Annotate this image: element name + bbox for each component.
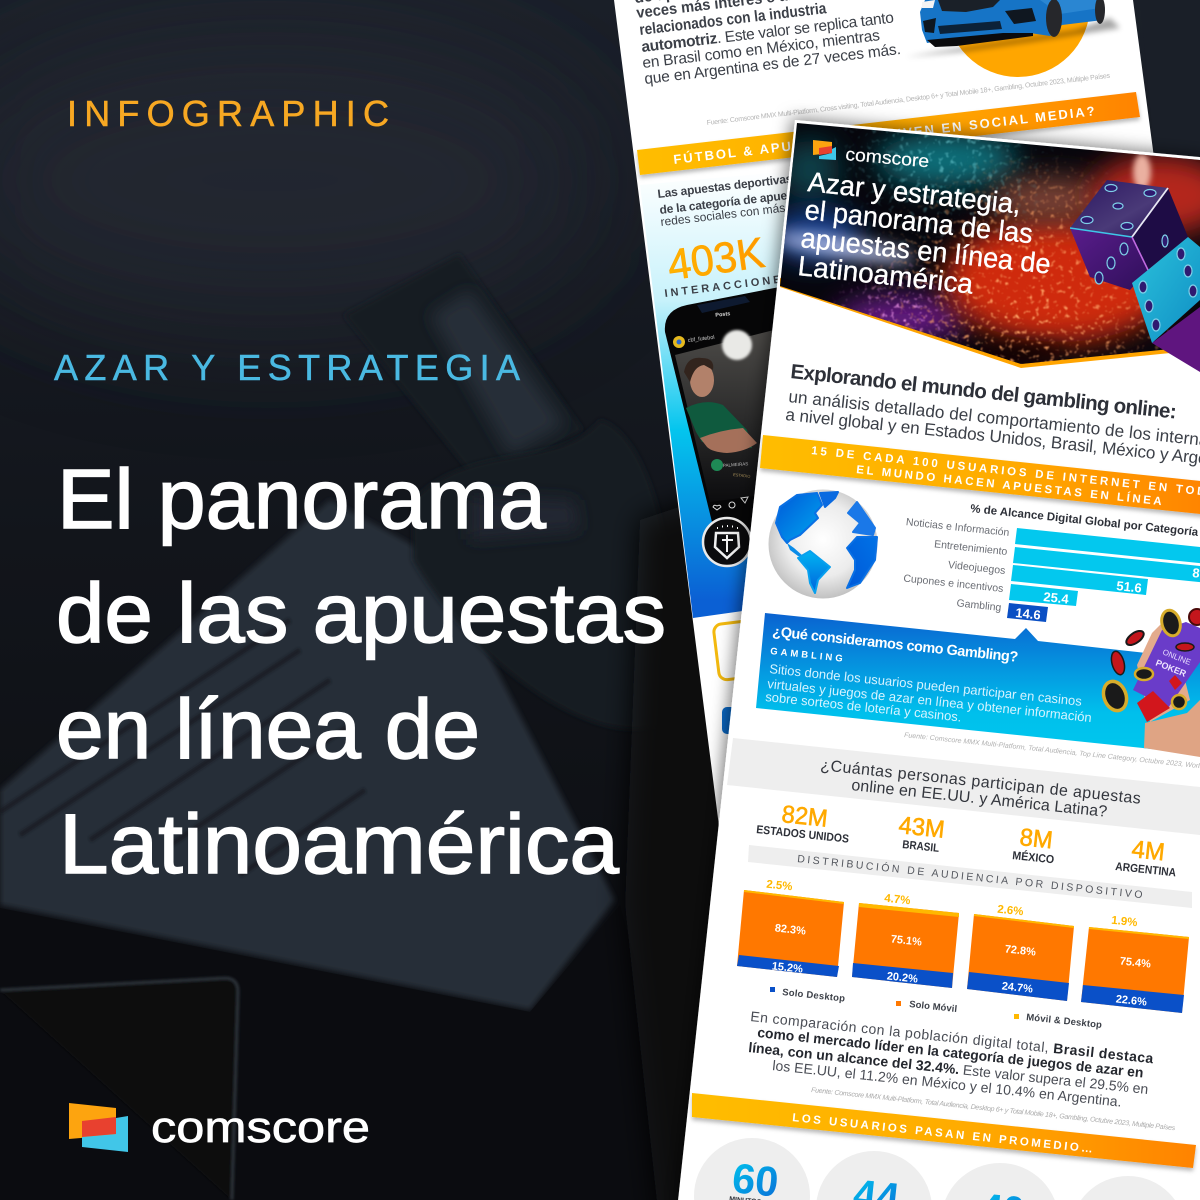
bar chart: alcance digital: [903, 503, 1200, 623]
callout: que consideramos como gambling: [756, 608, 1200, 757]
audience counts by country: ESTADOS UNIDOS: [756, 824, 850, 846]
stat: 403K interacciones: [664, 229, 794, 300]
back page intro text: [633, 0, 902, 88]
stack: Mexico: 72.8%: [1004, 943, 1037, 959]
globe icon: [768, 490, 878, 598]
paragraph: Brasil lider: línea, con un alcance del 32.4%. Este valor supera el 29.5% en: [748, 1039, 1149, 1097]
hero title: apuestas en línea de: [799, 222, 1052, 280]
phone with player post: Posts: [715, 311, 731, 319]
main title: Latinoamérica: [59, 797, 619, 891]
car on orange circle: [905, 0, 1120, 77]
orange band: los usuarios pasan: LOS USUARIOS PASAN EN PROMEDIO…: [792, 1112, 1093, 1156]
hero title: el panorama de las: [803, 194, 1034, 249]
stack: Brasil: 4.7%: [884, 893, 911, 907]
audience counts by country: BRASIL: [902, 839, 940, 855]
orange band: los usuarios pasan: [692, 1093, 1196, 1168]
back page gradient panel: [640, 170, 820, 618]
grey band: distribucion de audiencia: DISTRIBUCIÓN DE AUDIENCIA POR DISPOSITIVO: [797, 852, 1143, 901]
stack: Mexico: 2.6%: [997, 904, 1024, 918]
back page football text: Las apuestas deportivas: [657, 171, 793, 201]
main title: en línea de: [56, 682, 480, 776]
stack: Argentina: 1.9%: [1111, 915, 1138, 929]
hero logo: comscore: [845, 144, 930, 171]
audience counts by country: [756, 801, 1177, 879]
main title: El panorama: [57, 452, 546, 546]
grey question block: online en EE.UU. y América Latina?: [851, 777, 1108, 821]
intro heading: Explorando el mundo del gambling online:: [789, 360, 1178, 424]
chart legend: [770, 987, 1103, 1031]
callout: que consideramos como gambling: GAMBLING: [770, 646, 846, 665]
orange band: 15 de cada 100: [760, 435, 1200, 515]
stack: Brasil: [852, 893, 959, 988]
stack: Estados Unidos: [737, 879, 844, 977]
callout: que consideramos como gambling: sobre sorteos de lotería y casinos.: [765, 689, 962, 725]
callout: que consideramos como gambling: ¿Qué consideramos como Gambling?: [772, 624, 1019, 666]
chart legend: Solo Desktop: [782, 987, 846, 1005]
phone with player post: ESTADIO: [733, 472, 751, 479]
main title: [56, 452, 666, 891]
stack: Argentina: [1081, 915, 1189, 1013]
audience counts by country: ARGENTINA: [1115, 861, 1177, 879]
front infographic page: [677, 110, 1200, 1200]
stack: Brasil: 75.1%: [890, 933, 923, 949]
audience counts by country: 4M: [1130, 836, 1166, 866]
stack: Estados Unidos: 15.2%: [771, 960, 804, 976]
audience counts by country: MÉXICO: [1012, 849, 1055, 866]
yellow outline card: [713, 616, 789, 681]
paragraph source note: Fuente: Comscore MMX Multi-Platform, Total Audiencia, Desktop 6+ y Total Mobile 18+, Gambling, Octubre 2023, Multiple Países: [811, 1087, 1176, 1132]
heading: AZAR Y ESTRATEGIA: AZAR Y ESTRATEGIA: [54, 347, 520, 388]
back page football text: de la categoría de apuestas: [659, 186, 811, 217]
hand holding phone with poker chips: POKER: [1154, 658, 1188, 679]
grey question block: ¿Cuántas personas participan de apuestas: [820, 757, 1142, 808]
chart legend: Móvil & Desktop: [1026, 1012, 1103, 1031]
orange band: 15 de cada 100: EL MUNDO HACEN APUESTAS EN LÍNEA: [856, 463, 1162, 508]
stat: 403K interacciones: 403K: [665, 229, 768, 290]
audience counts by country: 82M: [780, 801, 829, 833]
category labels: Gambling: [956, 597, 1002, 614]
paragraph: Brasil lider: como el mercado líder en la categoría de juegos de azar en: [757, 1024, 1144, 1081]
phone with player post: PALMEIRAS: [723, 461, 748, 468]
hero banner: [770, 110, 1200, 380]
grey question block: [727, 738, 1200, 836]
stack: Mexico: [967, 904, 1074, 1001]
stack: Argentina: 75.4%: [1119, 955, 1152, 971]
football federation badge: [703, 518, 751, 566]
category labels: Cupones e incentivos: [903, 573, 1004, 595]
audience counts by country: 8M: [1018, 824, 1054, 854]
back page intro text: que en Argentina es de 27 veces más.: [643, 41, 902, 88]
back page orange band: FÚTBOL & APUESTAS: [673, 132, 846, 167]
category labels: [903, 516, 1010, 614]
hero title: Azar y estrategia,: [806, 166, 1022, 220]
stack: Brasil: 20.2%: [886, 970, 919, 986]
chart legend: Solo Móvil: [909, 999, 958, 1015]
comscore logo: [69, 1103, 370, 1152]
stack: Mexico: 24.7%: [1001, 980, 1034, 996]
callout: que consideramos como gambling: Sitios donde los usuarios pueden participar en casinos: [769, 661, 1083, 709]
comscore logo: comscore: [151, 1103, 370, 1152]
paragraph: Brasil lider: [748, 1008, 1154, 1110]
paragraph: Brasil lider: En comparación con la población digital total, Brasil destaca: [750, 1008, 1154, 1066]
hand holding phone with poker chips: [1100, 608, 1200, 757]
value labels: [1015, 565, 1200, 623]
bars: [1015, 528, 1200, 564]
back page intro text: en Brasil como en México, mientras: [641, 27, 881, 72]
facebook icon: [722, 707, 748, 734]
intro heading: [785, 360, 1200, 472]
stack: Estados Unidos: 82.3%: [774, 922, 807, 938]
bar chart: alcance digital: % de Alcance Digital Global por Categoría: [970, 503, 1199, 539]
back page orange band: [637, 92, 1140, 175]
back page intro text: automotriz. Este valor se replica tanto: [640, 9, 895, 56]
stat circles: minutes: [694, 1138, 1186, 1200]
phone with player post: [664, 288, 777, 532]
back infographic page: [614, 0, 1154, 826]
stacked bar chart: device distribution: [737, 879, 1189, 1013]
callout: que consideramos como gambling: virtuales y juegos de azar en línea y obtener información: [767, 676, 1092, 725]
main title: de las apuestas: [56, 566, 666, 660]
category labels: Entretenimiento: [934, 538, 1008, 558]
dice: [1070, 180, 1200, 372]
back page orange band: SE VIVEN EN SOCIAL MEDIA?: [860, 103, 1097, 145]
back page football text: redes sociales con más: [660, 201, 786, 229]
category labels: Videojuegos: [947, 559, 1006, 577]
audience counts by country: 43M: [897, 812, 946, 844]
hero title: Latinoamérica: [796, 250, 975, 300]
stack: Argentina: 22.6%: [1115, 993, 1148, 1009]
phone with player post: cbf_futebol: [688, 335, 715, 344]
grey band: distribucion de audiencia: [748, 845, 1192, 908]
hero logo: [813, 140, 930, 171]
paragraph: Brasil lider: los EE.UU, el 11.2% en México y el 10.4% en Argentina.: [772, 1057, 1122, 1110]
back page source note: Fuente: Comscore MMX Multi-Platform, Cross visiting, Total Audiencia, Desktop 6+ y Total Mobile 18+, Gambling, Octubre 2023, Múltiple Países: [706, 73, 1111, 127]
value labels: 25.4: [1043, 589, 1070, 607]
stat: 403K interacciones: INTERACCIONES: [664, 272, 794, 300]
heading: INFOGRAPHIC: INFOGRAPHIC: [67, 93, 389, 134]
stack: Estados Unidos: 2.5%: [766, 879, 793, 893]
hero title: [796, 166, 1052, 300]
hand holding phone with poker chips: ONLINE: [1161, 648, 1192, 667]
value labels: 51.6: [1116, 578, 1142, 596]
back page football text: [657, 171, 811, 229]
value labels: 14.6: [1015, 605, 1041, 623]
category labels: Noticias e Información: [905, 516, 1010, 539]
